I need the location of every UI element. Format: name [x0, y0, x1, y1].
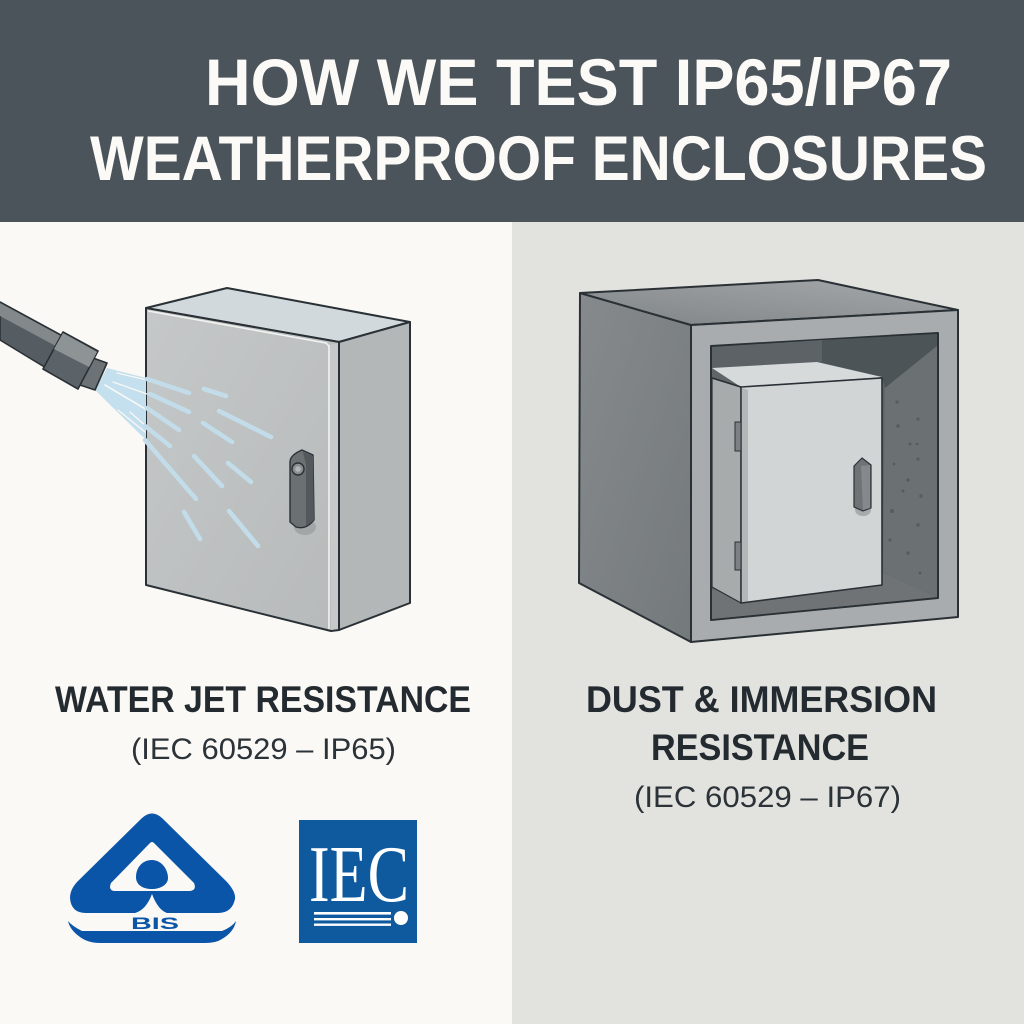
- water spray: [95, 368, 271, 546]
- panel: header band: [0, 0, 1024, 222]
- chamber top wall: [580, 280, 958, 325]
- logo: BIS: BIS: [131, 914, 179, 933]
- subheading: IP65: (IEC 60529 – IP65): [131, 733, 396, 766]
- inner enclosure: [712, 362, 882, 603]
- panel: left background: [0, 222, 512, 1024]
- panel: right background: [512, 222, 1024, 1024]
- illustration: enclosure inside dust chamber: [579, 280, 958, 642]
- illustration: enclosure under water jet: [0, 288, 410, 631]
- logo: IEC: [299, 820, 417, 943]
- subheading: IP67: (IEC 60529 – IP67): [634, 781, 901, 814]
- heading: dust and immersion: DUST & IMMERSION: [586, 679, 937, 720]
- handle: [854, 458, 871, 516]
- enclosure door: [146, 308, 339, 631]
- dust specks: [888, 400, 923, 574]
- chamber opening: [711, 333, 938, 620]
- logo: IEC: IEC: [309, 831, 409, 919]
- enclosure top face: [146, 288, 410, 342]
- hinges: [735, 422, 741, 451]
- title: HOW WE TEST IP65/IP67: [205, 45, 952, 119]
- chamber left wall: [579, 293, 691, 642]
- enclosure side face: [339, 322, 410, 630]
- hose and nozzle: [0, 302, 107, 390]
- heading: dust and immersion: RESISTANCE: [651, 727, 869, 768]
- title: [90, 45, 987, 194]
- door handle: [290, 450, 316, 535]
- logo: BIS: [68, 814, 236, 943]
- heading: dust and immersion: [586, 679, 937, 768]
- heading: water jet: WATER JET RESISTANCE: [55, 679, 471, 720]
- chamber front frame: [691, 310, 958, 642]
